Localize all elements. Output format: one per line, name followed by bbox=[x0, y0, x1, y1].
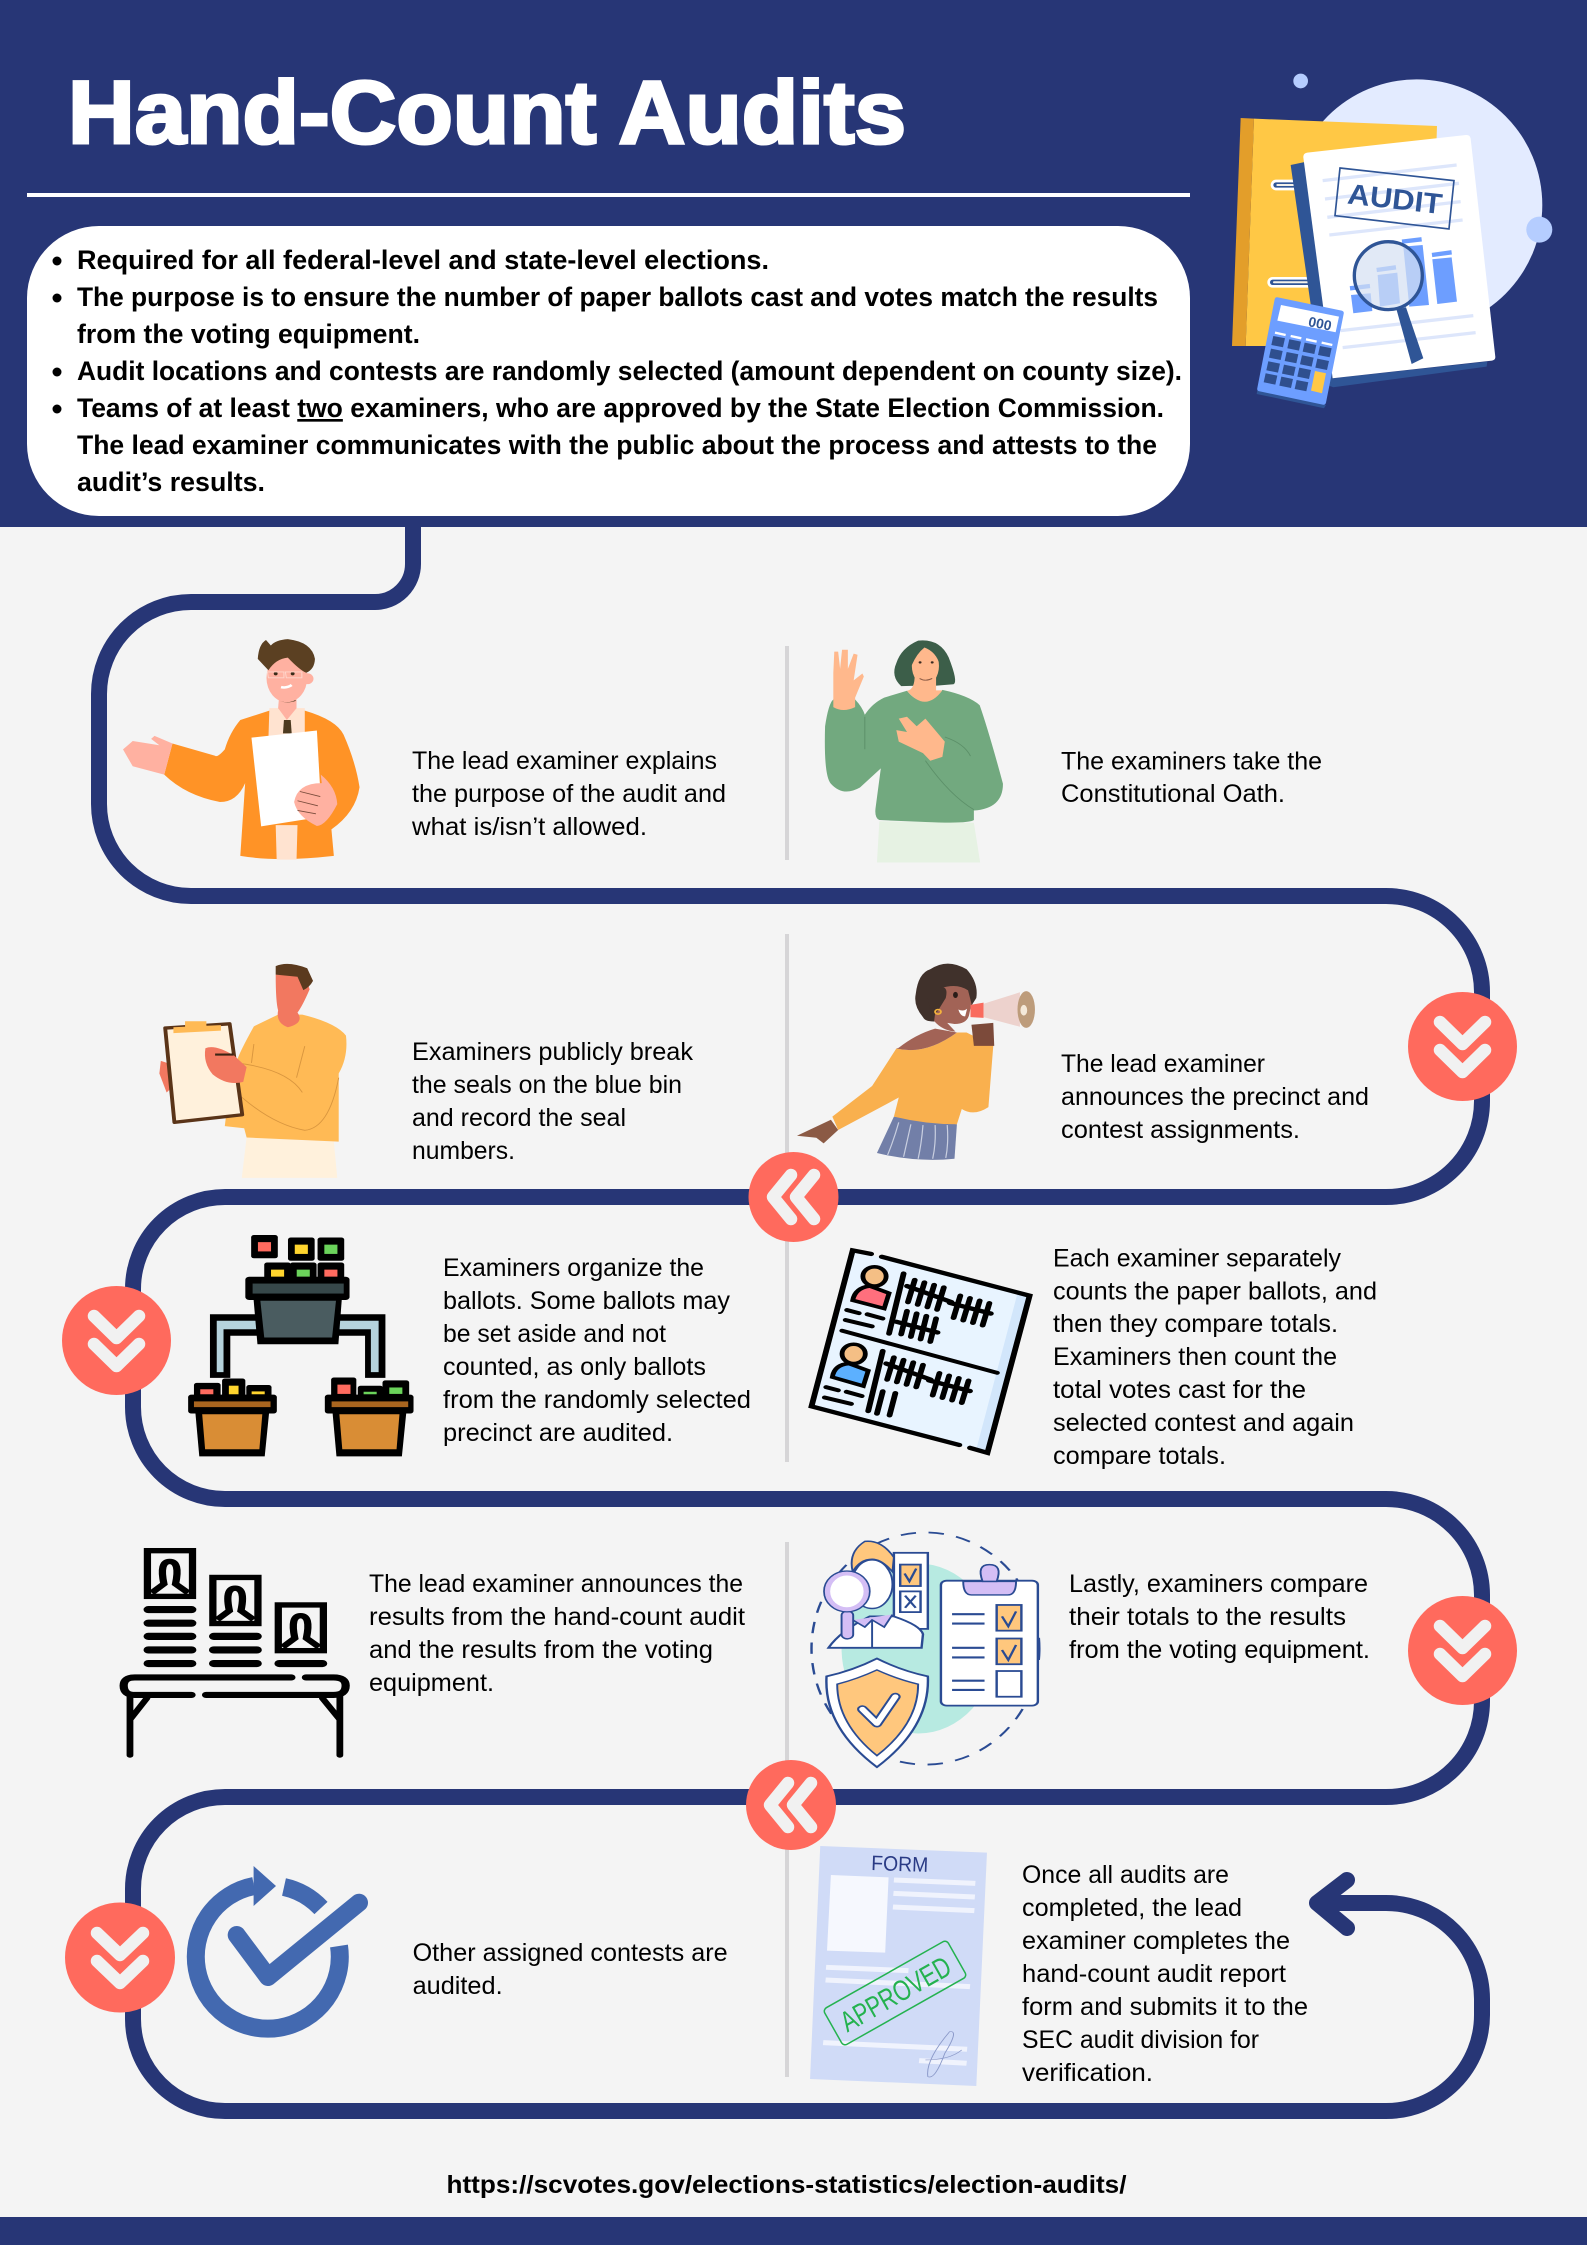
icon: tally sheet bbox=[812, 1250, 1030, 1453]
text: step 5: Examiners organize the bbox=[443, 1254, 704, 1282]
text: step 10: verification. bbox=[1022, 2059, 1153, 2087]
text: step 9: Other assigned contests are bbox=[413, 1939, 728, 1967]
text: step 6: selected contest and again bbox=[1053, 1409, 1354, 1437]
illustration: examiner with clipboard bbox=[159, 964, 346, 1178]
icon: compare totals checklist bbox=[812, 1532, 1039, 1767]
text: step 6: Each examiner separately bbox=[1053, 1244, 1341, 1272]
illustration: examiner taking oath bbox=[825, 640, 1003, 863]
text: step 7: and the results from the voting bbox=[369, 1636, 713, 1664]
icon: chevron down 4 bbox=[65, 1902, 175, 2012]
text: step 9 bbox=[413, 1939, 728, 2000]
illustration: examiner with megaphone bbox=[797, 964, 1035, 1160]
illustration: approved form: FORM bbox=[871, 1852, 929, 1877]
illustration: approved form bbox=[810, 1846, 987, 2086]
header band bbox=[0, 0, 1587, 527]
text: step 4: contest assignments. bbox=[1061, 1116, 1300, 1144]
text: step 1: The lead examiner explains bbox=[412, 747, 717, 775]
arrow: winding process path bbox=[99, 527, 1482, 2111]
panel: key facts bbox=[27, 226, 1190, 516]
panel: key facts: Teams of at least two examiners, who are approved by the State Election Commission. bbox=[77, 393, 1164, 423]
panel: key facts: Required for all federal-level and state-level elections. bbox=[77, 245, 769, 275]
footer band bbox=[0, 2217, 1587, 2245]
text: step 6: counts the paper ballots, and bbox=[1053, 1278, 1377, 1306]
text: step 3: and record the seal bbox=[412, 1104, 626, 1132]
text: step 10: completed, the lead bbox=[1022, 1894, 1242, 1922]
panel: key facts: The purpose is to ensure the number of paper ballots cast and votes match the results bbox=[77, 282, 1158, 312]
icon: audit documents: 000 bbox=[1307, 313, 1333, 334]
text: step 5: precinct are audited. bbox=[443, 1419, 673, 1447]
text: step 10: examiner completes the bbox=[1022, 1927, 1290, 1955]
text: step 5 bbox=[443, 1254, 751, 1447]
text: step 6: Examiners then count the bbox=[1053, 1343, 1337, 1371]
icon: chevron down 1 bbox=[1408, 992, 1517, 1101]
illustration: approved form: APPROVED bbox=[835, 1951, 957, 2039]
text: step 3: Examiners publicly break bbox=[412, 1038, 693, 1066]
text: step 6: total votes cast for the bbox=[1053, 1376, 1306, 1404]
text: step 3: numbers. bbox=[412, 1137, 515, 1165]
text: step 9: audited. bbox=[413, 1972, 503, 2000]
icon: audit documents: AUDIT bbox=[1346, 178, 1444, 221]
icon: audit documents bbox=[1232, 74, 1552, 408]
text: step 1: what is/isn’t allowed. bbox=[411, 813, 647, 841]
text: step 3 bbox=[412, 1038, 693, 1165]
title: Hand-Count Audits bbox=[68, 62, 906, 162]
text: step 2: The examiners take the bbox=[1061, 748, 1322, 776]
text: step 4: announces the precinct and bbox=[1061, 1083, 1369, 1111]
text: step 10: Once all audits are bbox=[1022, 1861, 1229, 1889]
panel: key facts: The lead examiner communicates with the public about the process and attests to the bbox=[77, 430, 1157, 460]
source link: https://scvotes.gov/elections-statistics/election-audits/ bbox=[446, 2171, 1127, 2199]
text: step 10 bbox=[1022, 1861, 1308, 2087]
text: step 2: Constitutional Oath. bbox=[1061, 780, 1285, 808]
text: step 7: The lead examiner announces the bbox=[369, 1570, 743, 1598]
text: step 1: the purpose of the audit and bbox=[412, 780, 726, 808]
text: step 5: ballots. Some ballots may bbox=[443, 1287, 730, 1315]
text: step 8: Lastly, examiners compare bbox=[1069, 1570, 1368, 1598]
text: step 8: from the voting equipment. bbox=[1069, 1636, 1370, 1664]
text: step 6: then they compare totals. bbox=[1053, 1310, 1338, 1338]
text: step 10: SEC audit division for bbox=[1022, 2026, 1259, 2054]
text: step 5: be set aside and not bbox=[443, 1320, 666, 1348]
text: step 6 bbox=[1053, 1244, 1377, 1470]
text: step 1 bbox=[411, 747, 726, 841]
text: step 4: The lead examiner bbox=[1061, 1050, 1265, 1078]
text: step 7: results from the hand-count audit bbox=[369, 1603, 745, 1631]
icon: chevron down 2 bbox=[62, 1286, 171, 1395]
icon: chevron left 1 bbox=[748, 1152, 838, 1242]
illustration: lead examiner with paper bbox=[123, 639, 360, 860]
text: step 7: equipment. bbox=[369, 1669, 494, 1697]
text: step 8: their totals to the results bbox=[1069, 1603, 1346, 1631]
icon: chevron down 3 bbox=[1408, 1596, 1517, 1705]
text: step 8 bbox=[1069, 1570, 1370, 1664]
icon: cycle check mark bbox=[196, 1866, 359, 2029]
icon: chevron left 2 bbox=[746, 1760, 836, 1850]
text: step 10: hand-count audit report bbox=[1022, 1960, 1286, 1988]
divider: step rows bbox=[785, 646, 789, 2077]
panel: key facts: Audit locations and contests are randomly selected (amount dependent on county size). bbox=[77, 356, 1182, 386]
icon: ballot boxes sorting bbox=[188, 1235, 414, 1456]
panel: key facts: audit’s results. bbox=[77, 467, 265, 497]
text: step 7 bbox=[369, 1570, 745, 1697]
text: step 4 bbox=[1061, 1050, 1369, 1144]
text: step 6: compare totals. bbox=[1053, 1442, 1226, 1470]
icon: candidate portraits on table bbox=[124, 1551, 346, 1755]
text: step 10: form and submits it to the bbox=[1022, 1993, 1308, 2021]
text: step 5: counted, as only ballots bbox=[443, 1353, 706, 1381]
text: step 2 bbox=[1061, 748, 1322, 808]
panel: key facts: from the voting equipment. bbox=[77, 319, 420, 349]
text: step 5: from the randomly selected bbox=[443, 1386, 751, 1414]
text: step 3: the seals on the blue bin bbox=[412, 1071, 682, 1099]
